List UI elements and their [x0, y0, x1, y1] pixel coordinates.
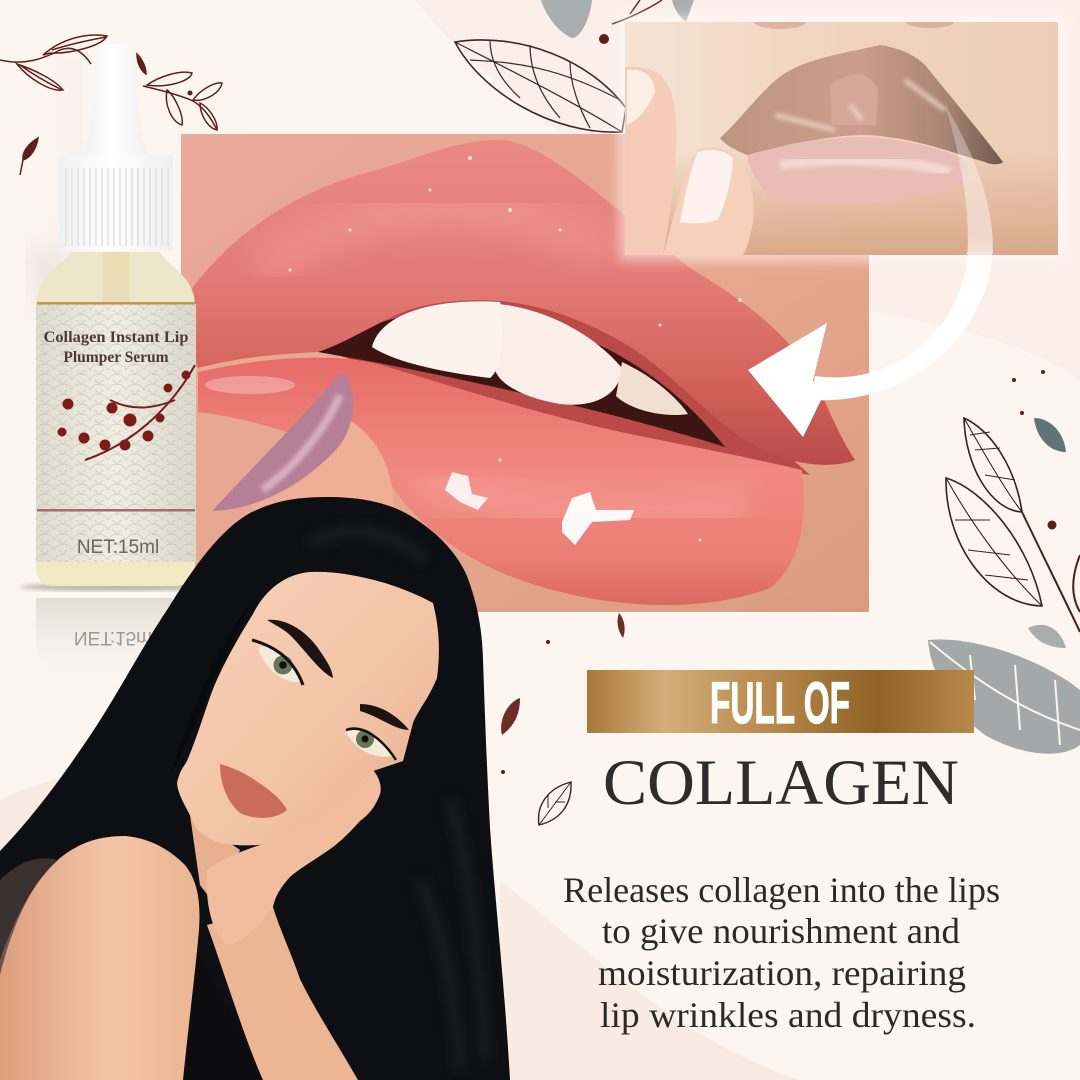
- neck shade: [190, 815, 240, 905]
- product bottle reflection: [36, 598, 172, 690]
- decorative leaves: top left branch: [0, 35, 222, 175]
- lips: [220, 764, 287, 818]
- shoulder: [0, 836, 199, 1080]
- description text: [563, 870, 1000, 1035]
- decorative leaves: small center: [501, 613, 625, 825]
- gold banner: [587, 670, 974, 736]
- description text: lip wrinkles and dryness.: [600, 995, 976, 1035]
- lip highlights: [205, 156, 742, 545]
- heading: collagen: COLLAGEN: [603, 747, 959, 819]
- hair strand by face: [170, 600, 253, 775]
- hair: [0, 497, 510, 1080]
- arm: [207, 907, 358, 1080]
- fingernail: [212, 372, 353, 511]
- bottle label: [36, 302, 196, 562]
- mouth interior: [318, 312, 725, 447]
- banner heading: FULL OF: [710, 671, 850, 736]
- lower lip: [198, 358, 804, 605]
- decorative leaves: top center: [455, 0, 694, 132]
- bottle cap: [60, 155, 173, 251]
- lips photo: [181, 134, 869, 612]
- dry lower lip: [747, 137, 968, 204]
- black top: [183, 950, 265, 1080]
- dry lips photo: [619, 15, 1064, 261]
- lip underlay: [341, 300, 810, 475]
- eyebrows: [267, 620, 409, 730]
- bottle label: NET:15ml: [77, 537, 159, 558]
- fingers: [625, 67, 676, 255]
- product bottle: [20, 44, 210, 591]
- hair sheen: [310, 532, 485, 1070]
- upper lip: [185, 140, 855, 465]
- teeth: [372, 301, 688, 415]
- eyes: [252, 640, 396, 760]
- description text: moisturization, repairing: [598, 953, 966, 993]
- bottle label: Plumper Serum: [63, 349, 169, 366]
- hand: [207, 770, 381, 945]
- product bottle reflection: NET:15ml: [74, 627, 156, 648]
- dropper bulb: [83, 44, 149, 156]
- face: [177, 572, 439, 845]
- dry upper lip: [720, 45, 1003, 164]
- bottle body: [36, 252, 195, 586]
- curved arrow: [748, 105, 993, 437]
- description text: to give nourishment and: [602, 911, 960, 951]
- description text: Releases collagen into the lips: [563, 870, 1000, 910]
- label text: Collagen Instant Lip: [44, 329, 188, 346]
- hair over shoulder: [0, 858, 58, 975]
- label branch: [58, 365, 195, 460]
- woman portrait: [0, 497, 510, 1080]
- finger: [251, 421, 394, 510]
- decorative leaves: right: [928, 370, 1080, 754]
